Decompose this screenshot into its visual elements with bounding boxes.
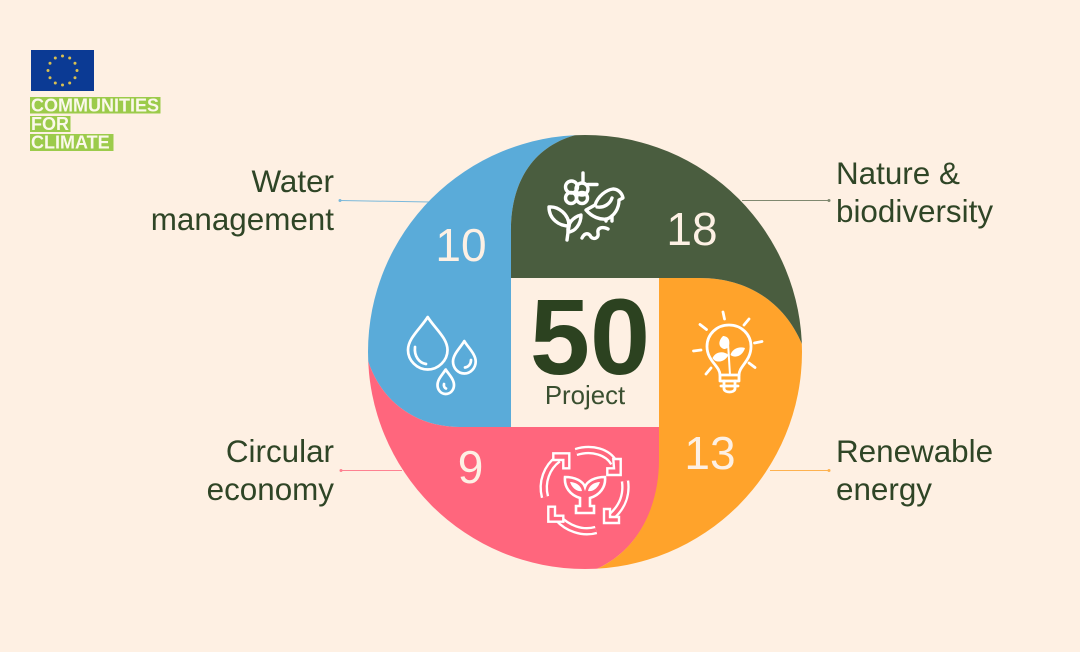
icon: EU flag	[31, 50, 94, 91]
logo wordmark: FOR	[31, 114, 69, 134]
centre total: 50	[530, 276, 650, 397]
number: circular: 9	[458, 441, 483, 493]
label: renewable energy: energy	[836, 472, 932, 507]
label: circular economy: Circular	[226, 434, 334, 469]
label: water management: management	[151, 202, 334, 237]
number: water: 10	[435, 219, 487, 271]
label: nature and biodiversity: Nature &	[836, 156, 960, 191]
segment: renewable energy	[597, 278, 802, 569]
logo wordmark: CLIMATE	[31, 132, 110, 152]
chart: pinwheel circle	[360, 125, 812, 580]
label: circular economy	[207, 434, 402, 507]
icon: nature (flower, leaves, bird, worm)	[549, 173, 623, 240]
label: nature and biodiversity: biodiversity	[836, 194, 993, 229]
label: water management: Water	[251, 164, 334, 199]
icon: light bulb with plant	[694, 312, 762, 392]
logo wordmark	[30, 96, 160, 152]
leader line: water	[338, 199, 430, 202]
number: energy: 13	[684, 427, 736, 479]
label: renewable energy: Renewable	[836, 434, 993, 469]
leader line: circular	[340, 469, 402, 472]
centre total: Project	[545, 382, 625, 410]
icon: circular plant with arrows	[544, 450, 625, 531]
logo wordmark: COMMUNITIES	[31, 96, 159, 116]
segment: water management	[368, 135, 576, 427]
leader line: nature	[742, 199, 830, 202]
label: nature and biodiversity	[742, 156, 993, 229]
leader line: energy	[770, 469, 830, 472]
segment: circular economy	[368, 361, 659, 569]
number: nature: 18	[666, 203, 718, 255]
label: circular economy: economy	[207, 472, 334, 507]
logo: Communities for Climate	[30, 50, 160, 152]
label: water management	[151, 164, 430, 237]
label: renewable energy	[770, 434, 993, 507]
segment: nature and biodiversity	[511, 135, 802, 344]
icon: water drops	[408, 317, 476, 394]
